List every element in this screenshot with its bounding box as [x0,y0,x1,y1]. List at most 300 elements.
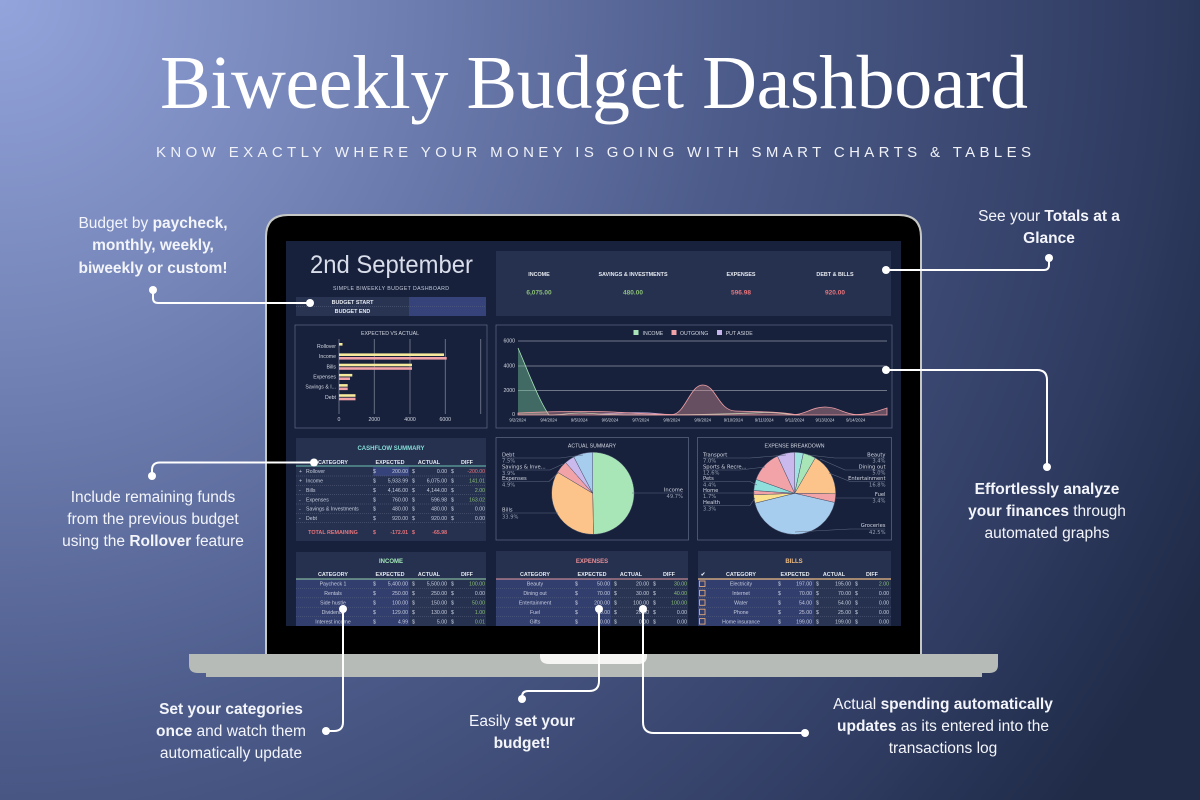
expense breakdown pie chart: Groceries [861,523,886,529]
expenses table: $ [653,619,656,625]
KPI income: 6,075.00 [526,290,552,296]
income table: $ [412,591,415,597]
cashflow summary table: $ [451,488,454,494]
title: Biweekly Budget Dashboard [160,41,1028,125]
callout: totals at a glance [978,208,1120,247]
callout: set categories: Set your categories [159,701,303,718]
cashflow summary table [296,438,486,541]
expenses table: $ [653,600,656,606]
KPI income: INCOME [528,272,550,278]
bills table: $ [855,619,858,625]
expenses table: ACTUAL [620,572,643,578]
actual summary pie chart: 4.9% [502,483,515,489]
connector: totals [882,254,1053,274]
dashboard subtitle: SIMPLE BIWEEKLY BUDGET DASHBOARD [333,286,449,292]
expenses table: DIFF [663,572,676,578]
area chart: income outgoing put aside: 2000 [503,388,515,394]
cashflow summary table: $ [373,478,376,484]
actual summary pie chart: 7.5% [502,459,515,465]
expense breakdown pie chart: Pets [703,476,714,482]
income table: 5,400.00 [388,582,408,588]
cashflow summary table: 480.00 [431,507,447,513]
total remaining row [308,530,447,536]
connector: rollover [148,458,318,480]
expenses table: Dining out [523,591,547,597]
expense breakdown pie chart [698,438,892,540]
income table: EXPECTED [375,572,405,578]
area chart: income outgoing put aside: 9/4/2024 [540,418,558,422]
bills table: $ [816,610,819,616]
KPI expenses [726,272,756,296]
expense breakdown pie chart: EXPENSE BREAKDOWN [765,444,825,450]
subtitle: KNOW EXACTLY WHERE YOUR MONEY IS GOING WITH SMART CHARTS & TABLES [156,144,1031,161]
cashflow summary table: 141.01 [469,478,485,484]
callout: set categories: once and watch them [156,723,306,740]
cashflow summary table: DIFF [461,460,474,466]
expenses table: $ [614,591,617,597]
bills table: 25.00 [838,610,851,616]
cashflow summary table: Expenses [306,497,329,503]
expenses table: $ [653,610,656,616]
cashflow summary table: CATEGORY [318,460,348,466]
cashflow summary table: 6,075.00 [427,478,447,484]
expenses table: $ [614,610,617,616]
total remaining row: $ [412,530,415,536]
bills table: 199.00 [835,619,851,625]
bar chart: expected vs actual: Debt [325,395,337,401]
bills table: $ [855,582,858,588]
expenses table: $ [575,600,578,606]
area chart: income outgoing put aside: 9/2/2024 [509,418,527,422]
bills table: 0.00 [879,619,889,625]
cashflow summary table: 596.98 [431,497,447,503]
expense breakdown pie chart: Transport [702,452,727,458]
cashflow summary table: $ [373,469,376,475]
area chart: income outgoing put aside: 0 [512,412,515,418]
income table: 100.00 [469,582,485,588]
income table: Interest income [315,619,351,625]
expense breakdown pie chart: 3.3% [703,506,716,512]
bills table: EXPECTED [780,572,810,578]
callout: set categories: automatically update [160,745,302,762]
callout: actual spending: updates as its entered into the [837,718,1049,735]
callout: analyze finances: automated graphs [985,525,1110,542]
callout: budget by paycheck: biweekly or custom! [78,260,228,277]
cashflow summary table: EXPECTED [375,460,405,466]
bar chart: expected vs actual: Income [319,354,336,360]
expense breakdown pie chart: Sports & Recre... [703,464,747,470]
expenses table: 50.00 [597,582,610,588]
cashflow summary table: $ [373,516,376,522]
callout: budget by paycheck [78,215,228,277]
bills table: $ [855,600,858,606]
cashflow summary table: - [299,497,301,503]
income table: 100.00 [392,600,408,606]
bills table: 2.00 [879,582,889,588]
bills table: 70.00 [838,591,851,597]
expenses table: Entertainment [519,600,552,606]
KPI savings [598,272,668,296]
bills table: $ [855,591,858,597]
bills table: 54.00 [799,600,812,606]
actual summary pie chart: 49.7% [667,494,683,500]
cashflow summary table: $ [412,507,415,513]
cashflow summary table: 920.00 [431,516,447,522]
callout: rollover feature: Include remaining funds [71,489,236,506]
bills table: 54.00 [838,600,851,606]
KPI expenses: 596.98 [731,290,751,296]
income table: ACTUAL [418,572,441,578]
laptop base [189,654,998,677]
expenses table: Gifts [530,619,541,625]
expense breakdown pie chart: Home [703,488,718,494]
expenses table: $ [575,610,578,616]
bar chart: expected vs actual: 6000 [440,417,451,423]
cashflow summary table: - [299,507,301,513]
bar chart: expected vs actual: Rollover [317,344,336,350]
expenses table: 0.00 [639,619,649,625]
bills table: Water [734,600,748,606]
bills table: 70.00 [799,591,812,597]
expenses table: 20.00 [636,610,649,616]
expenses table: EXPECTED [577,572,607,578]
bills table [698,551,891,626]
cashflow summary table: $ [412,516,415,522]
bar chart: expected vs actual: Bills [326,364,336,370]
area chart: income outgoing put aside: 9/9/2024 [694,418,712,422]
income table: $ [451,610,454,616]
cashflow summary table: $ [451,507,454,513]
cashflow summary table: $ [412,478,415,484]
bills table: $ [816,591,819,597]
actual summary pie chart: Bills [502,508,513,514]
expenses table: 30.00 [674,582,687,588]
callout: rollover feature [62,489,244,550]
income table: $ [451,582,454,588]
total remaining row: -65.98 [432,530,447,536]
area chart: income outgoing put aside: 9/7/2024 [632,418,650,422]
expenses table: 200.00 [594,600,610,606]
cashflow summary table: $ [373,497,376,503]
expenses heading: EXPENSES [576,559,608,565]
income heading: INCOME [379,559,403,565]
actual summary pie chart: 3.9% [502,471,515,477]
income table: Rentals [324,591,342,597]
bills heading: BILLS [785,559,803,565]
cashflow summary table: 5,933.99 [388,478,408,484]
cashflow summary table: $ [373,488,376,494]
KPI debt and bills: 920.00 [825,290,845,296]
bills table: $ [778,610,781,616]
bills table: $ [816,619,819,625]
cashflow summary table: - [299,516,301,522]
expense breakdown pie chart: 5.0% [872,471,886,477]
cashflow summary table: 480.00 [392,507,408,513]
income table: Paycheck 1 [320,582,347,588]
bills table: CATEGORY [726,572,756,578]
cashflow summary table: $ [412,469,415,475]
callout: actual spending [833,696,1053,757]
area chart: income outgoing put aside: 9/12/2024 [785,418,805,422]
cashflow summary table: $ [451,478,454,484]
expense breakdown pie chart: 7.0% [703,459,716,465]
cashflow heading: CASHFLOW SUMMARY [357,446,425,452]
bills table: ✔ [701,572,705,578]
callout: totals at a glance: See your Totals at a [978,208,1120,225]
budget date rows: BUDGET START [332,300,374,306]
expense breakdown pie chart: 16.8% [869,483,886,489]
connector: graphs [882,366,1051,471]
cashflow summary table: - [299,488,301,494]
income table: $ [451,591,454,597]
bar chart: expected vs actual: Expenses [313,374,336,380]
cashflow summary table: $ [451,516,454,522]
income table [296,552,486,626]
cashflow summary table: + [299,478,302,484]
callout: rollover feature: from the previous budget [67,511,239,528]
expense breakdown pie chart: Dining out [859,464,886,470]
expenses table: Fuel [530,610,540,616]
callout: budget by paycheck: monthly, weekly, [92,237,214,254]
cashflow summary table: 0.00 [437,469,447,475]
bills table: $ [778,619,781,625]
budget date rows [296,297,486,316]
income table: DIFF [461,572,474,578]
callout: set budget: budget! [494,735,550,752]
bills table: Home insurance [722,619,760,625]
cashflow summary table: 760.00 [392,497,408,503]
expenses table: $ [653,582,656,588]
cashflow summary table: 920.00 [392,516,408,522]
KPI panel [496,251,891,316]
cashflow summary table: ACTUAL [418,460,441,466]
expense breakdown pie chart: Health [703,500,720,506]
total remaining row: -172.01 [390,530,408,536]
area chart: income outgoing put aside: 9/6/2024 [602,418,619,422]
expense breakdown pie chart: 4.4% [703,483,716,489]
outgoing series [518,385,887,415]
callout: analyze finances [968,481,1126,542]
bills table: 25.00 [799,610,812,616]
actual summary pie chart: Income [664,488,683,494]
cashflow summary table: Bills [306,488,316,494]
income table: CATEGORY [318,572,348,578]
expenses table: $ [614,582,617,588]
bills table: $ [778,582,781,588]
income table: $ [373,600,376,606]
income table: $ [451,600,454,606]
bar chart: expected vs actual: Savings & I... [305,385,336,391]
cashflow summary table: $ [451,469,454,475]
expenses table: 20.00 [597,610,610,616]
area chart: income outgoing put aside: 9/11/2024 [755,418,774,422]
actual summary pie chart [496,438,688,540]
bills table: Internet [732,591,750,597]
actual summary pie chart: Expenses [502,476,527,482]
chart legend [634,330,753,337]
expenses table: 0.00 [677,619,687,625]
income table: 0.00 [475,591,485,597]
expenses table: $ [575,619,578,625]
total remaining row: TOTAL REMAINING [308,530,358,536]
expenses table: 100.00 [633,600,649,606]
budget date rows: BUDGET END [335,309,370,315]
cashflow summary table: -200.00 [467,469,485,475]
expense breakdown pie chart: 3.4% [872,459,886,465]
actual summary pie chart: Savings & Inve... [502,464,546,470]
KPI expenses: EXPENSES [726,272,756,278]
cashflow summary table: 2.00 [475,488,485,494]
KPI debt and bills [816,272,854,296]
chart legend: PUT ASIDE [726,331,753,337]
income table: 130.00 [431,610,447,616]
expenses table: $ [653,591,656,597]
cashflow summary table: 0.00 [475,507,485,513]
income table: $ [412,600,415,606]
expenses table: 0.00 [677,610,687,616]
callout: actual spending: Actual spending automatically [833,696,1053,713]
connector: budget period [149,286,314,307]
income series [518,348,549,415]
income table: 250.00 [392,591,408,597]
bills table: DIFF [866,572,879,578]
bills table: 197.00 [796,582,812,588]
checkboxes [700,581,705,624]
date panel [296,251,486,316]
income table: $ [373,591,376,597]
cashflow summary table: 200.00 [392,469,408,475]
bills table: $ [778,591,781,597]
cashflow summary table: + [299,469,302,475]
bills table: Phone [733,610,749,616]
income table: 150.00 [431,600,447,606]
expense breakdown pie chart: Entertainment [848,476,886,482]
callout: set budget [469,713,575,752]
KPI income [526,272,552,296]
bar chart: expected vs actual: EXPECTED VS ACTUAL [361,331,419,337]
income table: Dividends [322,610,345,616]
actual summary pie chart: 33.9% [502,514,519,520]
income table: $ [373,582,376,588]
callout: budget by paycheck: Budget by paycheck, [78,215,228,232]
cashflow summary table: $ [373,507,376,513]
laptop mockup [189,215,998,677]
income table: 4.99 [398,619,408,625]
area chart: income outgoing put aside: 9/10/2024 [724,418,743,422]
bills table: $ [816,600,819,606]
bills table: 0.00 [879,610,889,616]
bills table: 199.00 [796,619,812,625]
callout: analyze finances: your finances through [968,503,1126,520]
bills table: $ [778,600,781,606]
bar chart: expected vs actual: 2000 [369,417,380,423]
bills table: $ [816,582,819,588]
actual summary pie chart: Debt [502,452,515,458]
expenses table: 20.00 [636,582,649,588]
connector: actual spending [639,605,809,737]
expense breakdown pie chart: 12.6% [703,471,720,477]
callout: rollover feature: using the Rollover feature [62,533,244,550]
cashflow summary table: 4,146.00 [388,488,408,494]
expenses table: Beauty [527,582,543,588]
laptop screen bezel [266,215,921,660]
income table: 129.00 [392,610,408,616]
laptop notch [540,654,647,664]
area chart: income outgoing put aside: 4000 [503,364,515,370]
chart legend: INCOME [642,331,664,337]
KPI savings: SAVINGS & INVESTMENTS [598,272,668,278]
bills table: 0.00 [879,600,889,606]
actual summary pie chart: ACTUAL SUMMARY [568,444,617,450]
total remaining row: $ [373,530,376,536]
expenses table: $ [575,582,578,588]
bills table: 195.00 [835,582,851,588]
bills table: ACTUAL [823,572,846,578]
bar chart: expected vs actual [295,325,487,428]
KPI debt and bills: DEBT & BILLS [816,272,854,278]
income table: $ [373,610,376,616]
expenses table: 70.00 [597,591,610,597]
income table: 1.00 [475,610,485,616]
expenses table: CATEGORY [520,572,550,578]
callout: analyze finances: Effortlessly analyze [975,481,1120,498]
callout: actual spending: transactions log [889,740,997,757]
cashflow summary table: 4,144.00 [427,488,447,494]
income table: $ [412,582,415,588]
area chart: income outgoing put aside [496,325,892,428]
expenses table: 30.00 [636,591,649,597]
bar chart: expected vs actual: 0 [338,417,341,423]
date heading: 2nd September [310,251,473,279]
income table: 5.00 [437,619,447,625]
cashflow summary table: $ [412,488,415,494]
expenses table: $ [575,591,578,597]
income table: $ [412,619,415,625]
cashflow summary table: Income [306,478,323,484]
income table: 250.00 [431,591,447,597]
bills table: $ [855,610,858,616]
area chart: income outgoing put aside: 6000 [503,338,515,344]
bar chart: expected vs actual: 4000 [404,417,416,423]
chart legend: OUTGOING [680,331,708,337]
expense breakdown pie chart: 3.4% [872,499,886,505]
income table: $ [373,619,376,625]
connector: set budget [518,605,603,703]
bills table: Electricity [730,582,752,588]
expenses table: 100.00 [671,600,687,606]
cashflow summary table: Rollover [306,469,325,475]
area chart: income outgoing put aside: 9/5/2024 [571,418,588,422]
cashflow summary table: 0.00 [475,516,485,522]
KPI savings: 480.00 [623,290,643,296]
expense breakdown pie chart: 1.7% [703,494,716,500]
area chart: income outgoing put aside: 9/13/2024 [815,418,835,422]
income table: 50.00 [472,600,485,606]
cashflow summary table: Debt [306,516,318,522]
cashflow summary table: $ [412,497,415,503]
cashflow summary table: 163.02 [469,497,485,503]
cashflow summary table: $ [451,497,454,503]
expense breakdown pie chart: Beauty [867,452,886,458]
expenses table: $ [614,619,617,625]
income table: 5,500.00 [427,582,447,588]
bills table: 0.00 [879,591,889,597]
area chart: income outgoing put aside: 9/8/2024 [663,418,681,422]
expenses table: 0.00 [600,619,610,625]
income table: 0.01 [475,619,485,625]
expenses table: 40.00 [674,591,687,597]
connector: categories [322,605,347,735]
